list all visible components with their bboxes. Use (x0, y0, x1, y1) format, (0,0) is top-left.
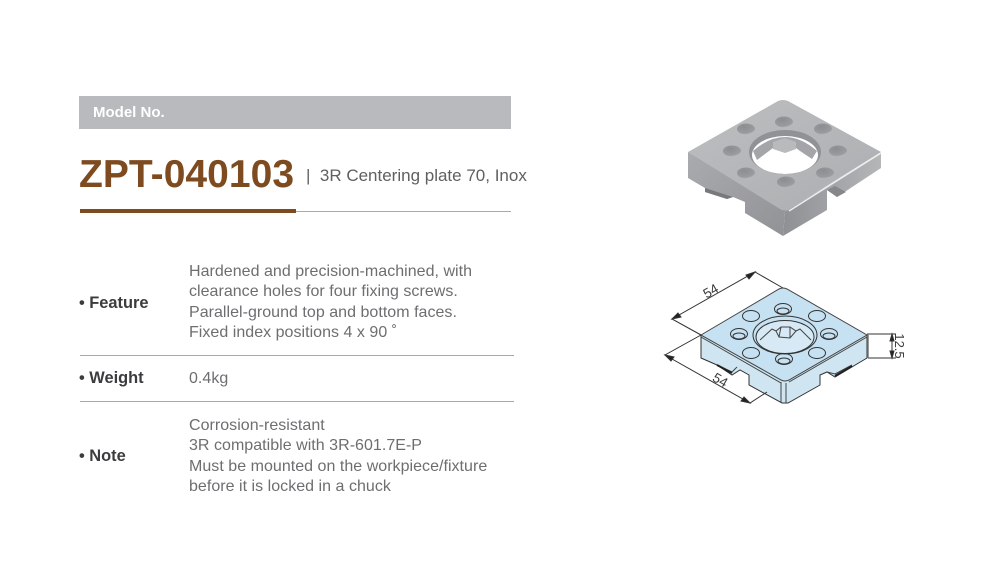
heading underline (80, 209, 511, 213)
product photo: centering plate (688, 100, 881, 236)
note label: • Note (79, 447, 126, 465)
photo: centre bore (749, 130, 821, 174)
feature text: Parallel-ground top and bottom faces. (189, 304, 457, 321)
weight value: 0.4kg (189, 370, 228, 387)
model number label: Model No. (93, 104, 165, 121)
note text (189, 417, 487, 495)
feature text (189, 263, 472, 341)
dimension label: top 54: 54 (700, 281, 721, 301)
note text: before it is locked in a chuck (189, 478, 391, 495)
dimension label: height 12.5: 12.5 (892, 333, 907, 359)
note text: 3R compatible with 3R-601.7E-P (189, 437, 422, 454)
feature label: • Feature (79, 294, 149, 312)
drawing: dimension lines (665, 272, 896, 403)
drawing: plate body (701, 288, 867, 403)
weight label: • Weight (79, 369, 144, 387)
product name: | 3R Centering plate 70, Inox (306, 166, 527, 185)
note text: Corrosion-resistant (189, 417, 325, 434)
model number bar (79, 96, 511, 129)
dimension label: bottom 54: 54 (710, 370, 731, 391)
model code heading: ZPT-040103 (79, 153, 294, 196)
technical drawing: dimensioned plate (665, 272, 896, 403)
feature text: Fixed index positions 4 x 90 ˚ (189, 324, 397, 341)
note text: Must be mounted on the workpiece/fixture (189, 458, 487, 475)
feature text: Hardened and precision-machined, with (189, 263, 472, 280)
feature text: clearance holes for four fixing screws. (189, 283, 458, 300)
